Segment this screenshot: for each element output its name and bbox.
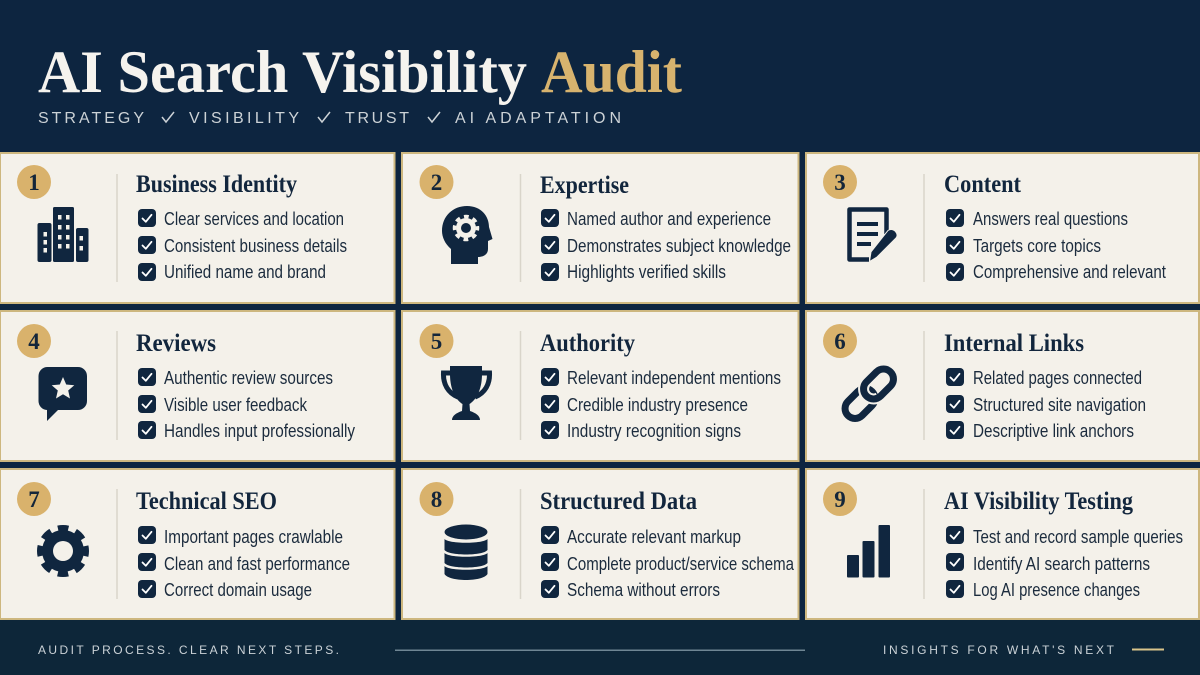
panel: 2 Expertise: Highlights verified skills	[567, 262, 726, 282]
panel: 2 Expertise: Demonstrates subject knowledge	[567, 236, 791, 256]
panel: 6 Internal Links	[806, 311, 1199, 461]
icon: trophy	[443, 366, 490, 420]
panel: 6 Internal Links: Descriptive link anchors	[973, 421, 1134, 441]
panel: 6 Internal Links: Structured site navigation	[973, 395, 1146, 415]
panel: 7 Technical SEO: 7	[28, 487, 40, 512]
footer	[38, 643, 1164, 657]
panel: 1 Business Identity: Clear services and location	[164, 209, 344, 229]
panel: 8 Structured Data: Complete product/service schema	[567, 554, 795, 574]
panel: 4 Reviews: Visible user feedback	[164, 395, 308, 415]
panel: 6 Internal Links: 6	[834, 329, 846, 354]
panel: 9 AI Visibility Testing: 9	[834, 487, 846, 512]
panel: 7 Technical SEO: Technical SEO	[136, 488, 277, 515]
panel: 4 Reviews	[0, 311, 394, 461]
panel: 7 Technical SEO	[0, 469, 394, 619]
panel: 2 Expertise: 2	[431, 170, 442, 195]
panel: 9 AI Visibility Testing	[806, 469, 1199, 619]
panel: 5 Authority	[402, 311, 798, 461]
panel: 8 Structured Data: 8	[431, 487, 442, 512]
panel: 1 Business Identity: 1	[28, 170, 40, 195]
panel: 2 Expertise: Expertise	[540, 172, 629, 199]
footer: INSIGHTS FOR WHAT'S NEXT	[883, 643, 1115, 657]
subtitle: VISIBILITY	[189, 110, 299, 127]
panel: 5 Authority: Relevant independent mentions	[567, 368, 781, 388]
icon: gear	[40, 528, 86, 574]
subtitle: TRUST	[345, 110, 409, 127]
panel: 5 Authority: Industry recognition signs	[567, 421, 741, 441]
panel: 4 Reviews: 4	[28, 329, 40, 354]
panel: 1 Business Identity	[0, 153, 394, 303]
panel: 3 Content: Comprehensive and relevant	[973, 262, 1166, 282]
panel: 3 Content: Answers real questions	[973, 209, 1128, 229]
panel: 5 Authority: 5	[431, 329, 442, 354]
panel: 2 Expertise: Named author and experience	[567, 209, 771, 229]
panel: 8 Structured Data: Accurate relevant markup	[567, 527, 741, 547]
footer: AUDIT PROCESS. CLEAR NEXT STEPS.	[38, 643, 339, 657]
panel: 2 Expertise	[402, 153, 798, 303]
icon: chain link	[841, 365, 898, 423]
panel: 8 Structured Data: Structured Data	[540, 488, 697, 515]
title: Audit	[541, 39, 682, 105]
icon: head with gear	[442, 206, 492, 264]
panel: 7 Technical SEO: Clean and fast performance	[164, 554, 350, 574]
panel: 1 Business Identity: Consistent business details	[164, 236, 347, 256]
panel: 9 AI Visibility Testing: AI Visibility Testing	[944, 488, 1133, 515]
icon: database	[444, 524, 488, 580]
panel: 3 Content: 3	[834, 170, 846, 195]
icon: bar chart	[847, 525, 890, 578]
title: AI Search Visibility	[38, 39, 527, 105]
panel: 9 AI Visibility Testing: Identify AI search patterns	[973, 554, 1150, 574]
icon: document with pencil	[850, 210, 897, 262]
icon: speech bubble with star	[38, 367, 87, 421]
subtitle: STRATEGY	[38, 110, 144, 127]
panel: 3 Content: Content	[944, 171, 1022, 198]
subtitle	[38, 110, 621, 127]
panel: 8 Structured Data	[402, 469, 798, 619]
panel: 4 Reviews: Authentic review sources	[164, 368, 333, 388]
panel: 7 Technical SEO: Important pages crawlable	[164, 527, 343, 547]
panel: 4 Reviews: Reviews	[136, 330, 216, 357]
panel: 3 Content: Targets core topics	[973, 236, 1101, 256]
panel: 1 Business Identity: Unified name and brand	[164, 262, 326, 282]
panel: 4 Reviews: Handles input professionally	[164, 421, 355, 441]
panel: 1 Business Identity: Business Identity	[136, 171, 297, 198]
subtitle: AI ADAPTATION	[455, 110, 621, 127]
panel: 8 Structured Data: Schema without errors	[567, 580, 720, 600]
panel: 5 Authority: Credible industry presence	[567, 395, 748, 415]
panel: 6 Internal Links: Related pages connected	[973, 368, 1142, 388]
panel: 5 Authority: Authority	[540, 330, 635, 357]
panel: 6 Internal Links: Internal Links	[944, 330, 1084, 357]
icon: buildings	[38, 207, 88, 262]
panel: 3 Content	[806, 153, 1199, 303]
panel: 9 AI Visibility Testing: Log AI presence changes	[973, 580, 1140, 600]
panel: 7 Technical SEO: Correct domain usage	[164, 580, 312, 600]
